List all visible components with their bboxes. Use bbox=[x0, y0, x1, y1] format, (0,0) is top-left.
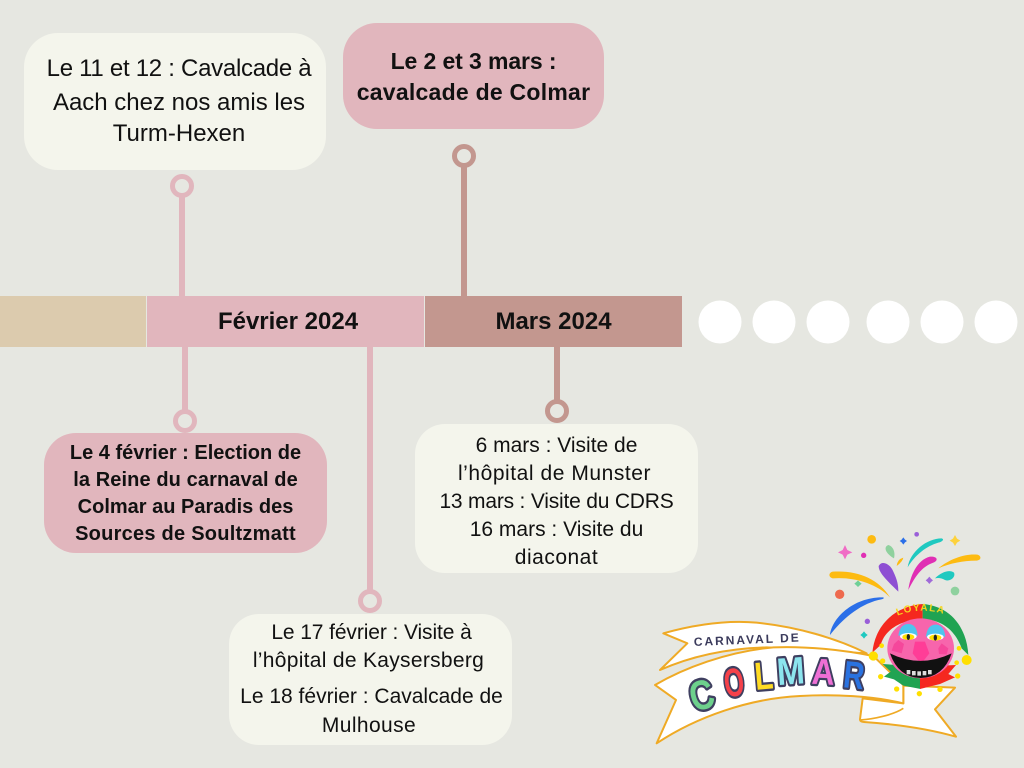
connector: 4 février bbox=[176, 347, 194, 430]
card: visites de mars: diaconat bbox=[515, 546, 598, 568]
logo: main ribbon bbox=[655, 647, 903, 743]
logo: jester face bbox=[887, 618, 954, 678]
logo: COLMAR lettering: A bbox=[811, 652, 836, 693]
card: 17 et 18 février: Le 18 février : Cavalcade de bbox=[240, 684, 503, 708]
card: 17 et 18 février: Le 17 février : Visite à bbox=[271, 620, 472, 644]
card: 17 et 18 février: l’hôpital de Kaysersberg bbox=[253, 648, 484, 672]
card: visites de mars: 16 mars : Visite du bbox=[470, 518, 643, 540]
card: visites de mars: 6 mars : Visite de bbox=[476, 434, 637, 456]
card: visites de mars bbox=[415, 424, 698, 573]
logo: COLMAR lettering: C bbox=[684, 670, 719, 721]
card: 17 et 18 février bbox=[229, 614, 512, 745]
card: 2 et 3 mars: Le 2 et 3 mars : bbox=[391, 48, 556, 74]
logo: COLMAR lettering: M bbox=[775, 648, 806, 694]
card: 17 et 18 février: Mulhouse bbox=[322, 714, 416, 736]
timeline bar: Mars 2024: Mars 2024 bbox=[495, 308, 612, 335]
card: 4 février bbox=[44, 433, 327, 553]
card: 4 février: Colmar au Paradis des bbox=[78, 496, 293, 518]
logo: jester collar bbox=[878, 658, 960, 696]
logo: COLMAR lettering: R bbox=[841, 653, 866, 698]
logo: upper ribbon bbox=[660, 622, 867, 670]
card: visites de mars: 13 mars : Visite du CDRS bbox=[439, 490, 674, 512]
card: 11 et 12 février bbox=[24, 33, 326, 170]
card: 2 et 3 mars bbox=[343, 23, 604, 129]
connector: 17 et 18 février bbox=[360, 347, 380, 610]
timeline bar: Mars 2024 bbox=[425, 296, 682, 347]
timeline bar: Février 2024 bbox=[147, 296, 424, 347]
card: visites de mars: l’hôpital de Munster bbox=[458, 462, 651, 484]
logo: COLMAR lettering bbox=[684, 648, 866, 721]
logo: confetti burst bbox=[829, 532, 980, 639]
card: 11 et 12 février: Aach chez nos amis les bbox=[53, 89, 305, 116]
card: 11 et 12 février: Le 11 et 12 : Cavalcade à bbox=[47, 55, 311, 82]
logo: jester hat: LOYALA bbox=[896, 604, 943, 616]
connector: 2 et 3 mars bbox=[454, 146, 474, 297]
logo: COLMAR lettering: O bbox=[721, 660, 747, 707]
connector: 11 et 12 février bbox=[172, 176, 192, 297]
timeline bar: January segment bbox=[0, 296, 146, 347]
connector: visites de mars bbox=[548, 347, 566, 420]
logo: COLMAR lettering: L bbox=[753, 655, 775, 699]
card: 2 et 3 mars: cavalcade de Colmar bbox=[357, 78, 590, 104]
logo: jester hat bbox=[868, 604, 972, 665]
card: 4 février: la Reine du carnaval de bbox=[73, 468, 298, 490]
card: 4 février: Le 4 février : Election de bbox=[70, 442, 301, 464]
card: 4 février: Sources de Soultzmatt bbox=[75, 522, 296, 544]
logo: upper ribbon: CARNAVAL DE bbox=[694, 631, 799, 649]
card: 11 et 12 février: Turm-Hexen bbox=[113, 120, 245, 147]
logo: back ribbon tail bbox=[860, 686, 956, 737]
timeline bar: Février 2024: Février 2024 bbox=[218, 308, 358, 335]
